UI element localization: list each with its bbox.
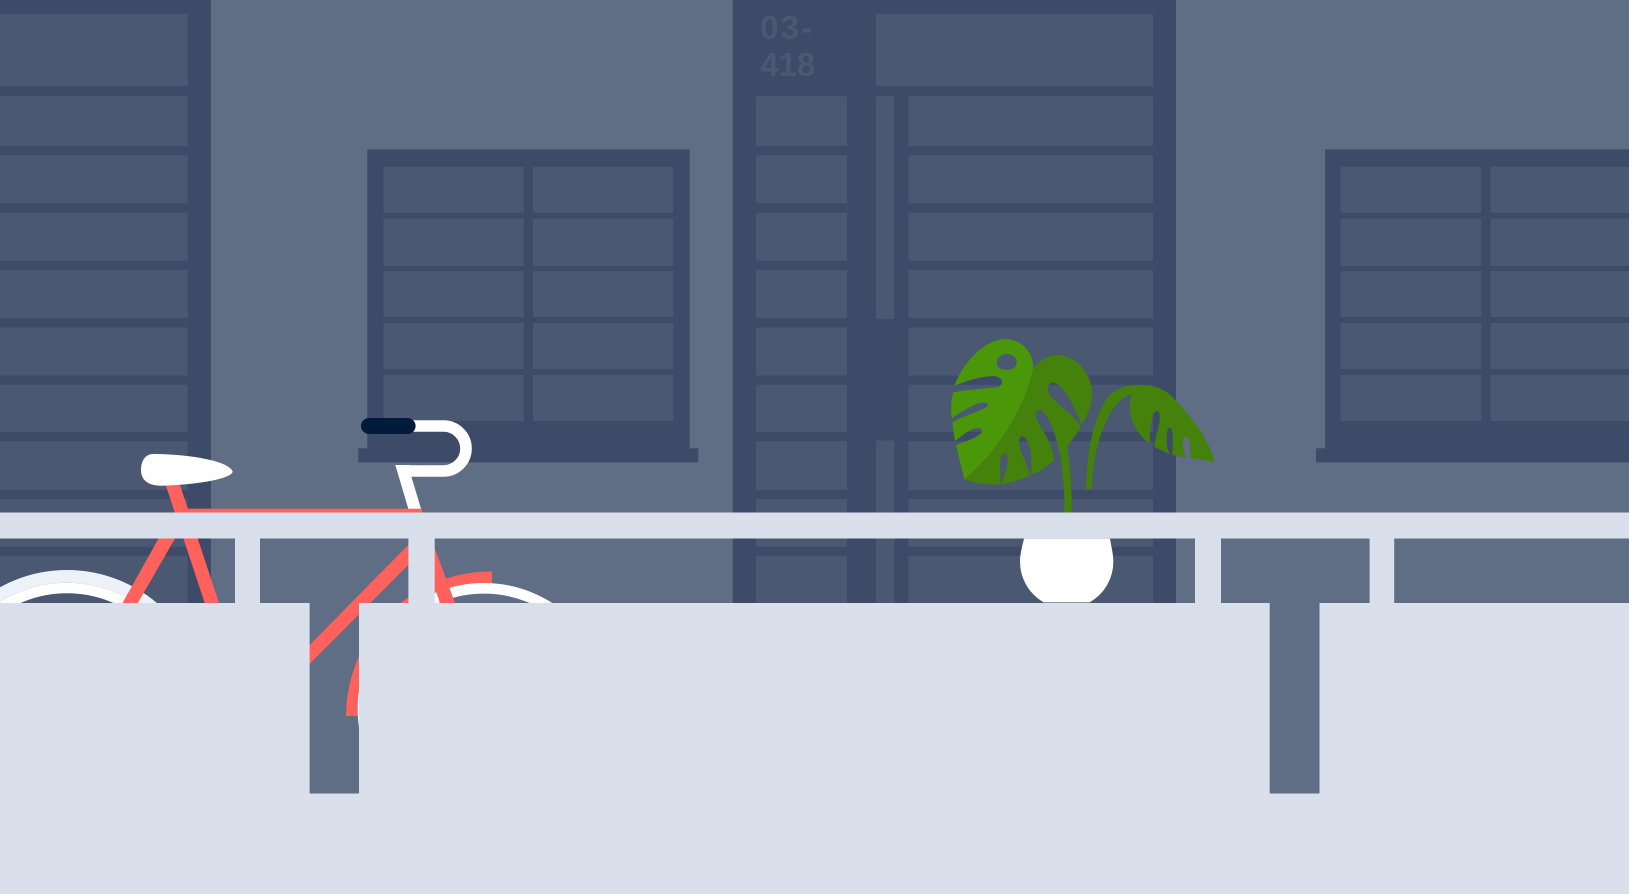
leaf: drooping right leaf and stem: [1086, 385, 1214, 489]
saddle: [141, 454, 233, 486]
front wheel: [363, 588, 605, 830]
balcony wall: [0, 603, 1629, 894]
plant pot: [1020, 539, 1113, 602]
plant stem: [1060, 447, 1072, 515]
main plant leaf and stem: [951, 339, 1092, 515]
front fender: [352, 577, 492, 716]
railing posts: [235, 538, 1394, 604]
railing top bar: [0, 512, 1629, 538]
panel: centre building facade: [733, 0, 1176, 610]
panel: middle window: [358, 149, 698, 462]
leaf: large, shaded half: [964, 355, 1092, 484]
rear wheel: [0, 576, 200, 842]
bicycle frame: [122, 485, 455, 673]
unit number sign: 03-: [760, 9, 814, 46]
potted monstera plant: [951, 339, 1214, 602]
balcony railing and wall: [0, 512, 1629, 894]
handlebar stem: [395, 465, 421, 509]
leaf: large, lit half: [951, 339, 1033, 479]
panel: right window: [1316, 149, 1629, 462]
panel: left building facade: [0, 0, 211, 610]
bicycle: [0, 418, 605, 842]
unit number sign: 418: [760, 46, 815, 83]
handlebar: [402, 426, 466, 471]
handlebar grip: [361, 418, 416, 434]
